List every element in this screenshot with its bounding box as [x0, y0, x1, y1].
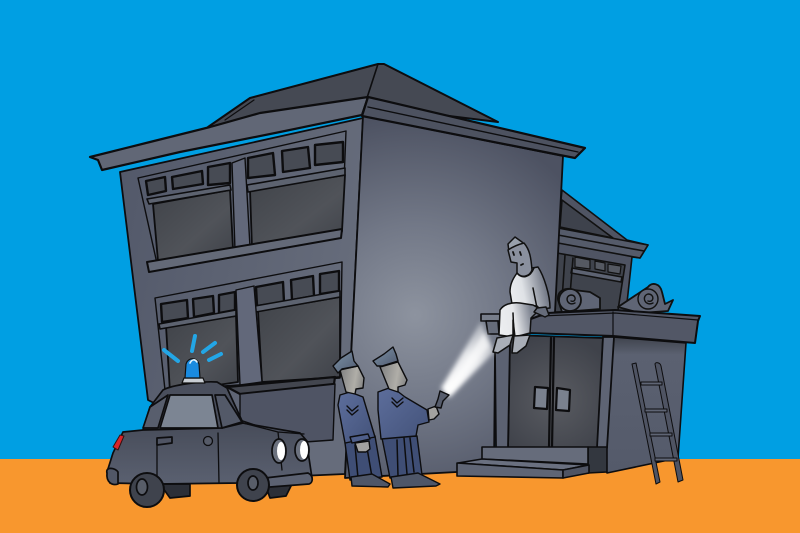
cap: [373, 347, 398, 366]
volutes on the ledge: [558, 284, 673, 313]
side window: [160, 395, 218, 428]
legs: [499, 303, 540, 337]
man sitting on the ledge: [493, 237, 550, 353]
hat: [508, 237, 527, 252]
cap: [333, 351, 358, 373]
car body: [107, 423, 312, 484]
hand: [534, 307, 549, 317]
lower left window: [155, 262, 342, 442]
doors: [495, 335, 614, 448]
ground: [0, 459, 800, 533]
shelf under the man: [481, 314, 500, 334]
rear and front axle shadow: [160, 484, 292, 498]
rear wheel: [130, 473, 164, 507]
head: [508, 243, 532, 276]
mirror knob: [204, 436, 212, 446]
rear window: [143, 395, 168, 428]
legs: [382, 436, 422, 478]
head: [380, 362, 407, 392]
taillight: [113, 435, 124, 450]
hand: [428, 406, 439, 420]
front wheel: [237, 469, 269, 501]
cuff: [350, 434, 370, 443]
upper roof: [208, 64, 498, 127]
main building: [90, 64, 585, 478]
shoes: [391, 473, 440, 488]
ladder: [632, 363, 683, 484]
front window: [215, 395, 242, 428]
siren: [164, 336, 221, 383]
hand: [355, 441, 370, 452]
side wall of the entrance: [598, 337, 686, 473]
police officer left: [333, 351, 390, 487]
police officer right: [373, 347, 449, 488]
door handle: [157, 437, 172, 445]
doors: [157, 433, 219, 483]
chevron: [392, 398, 403, 407]
door pillar: [597, 337, 614, 448]
siren light rays: [164, 336, 221, 361]
front bumper: [263, 473, 312, 487]
shoes: [493, 335, 530, 353]
cabin: [143, 382, 243, 432]
door handles: [534, 387, 570, 411]
entrance roof ledge: [528, 310, 700, 343]
collar: [517, 268, 534, 277]
police car: [107, 382, 312, 507]
rear bumper: [107, 468, 118, 485]
legs: [345, 436, 382, 480]
right eave: [362, 97, 585, 158]
upper left window: [138, 131, 346, 272]
shoes: [351, 474, 390, 487]
body and arm: [378, 387, 429, 439]
hood crease: [243, 423, 304, 470]
entrance steps: [457, 447, 607, 478]
siren base: [182, 378, 205, 383]
arm and torso: [510, 267, 550, 309]
right facade: [345, 116, 563, 478]
chevron: [347, 406, 358, 415]
right headlight: [295, 439, 309, 461]
flashlight beam: [441, 322, 494, 398]
left facade: [120, 118, 363, 476]
body: [338, 392, 375, 443]
rear wing of the building: [555, 190, 648, 312]
left eave: [90, 97, 368, 170]
left headlight: [272, 439, 286, 463]
siren dome: [185, 359, 200, 378]
head: [340, 366, 364, 394]
face details: [513, 252, 523, 265]
flashlight: [435, 391, 449, 408]
